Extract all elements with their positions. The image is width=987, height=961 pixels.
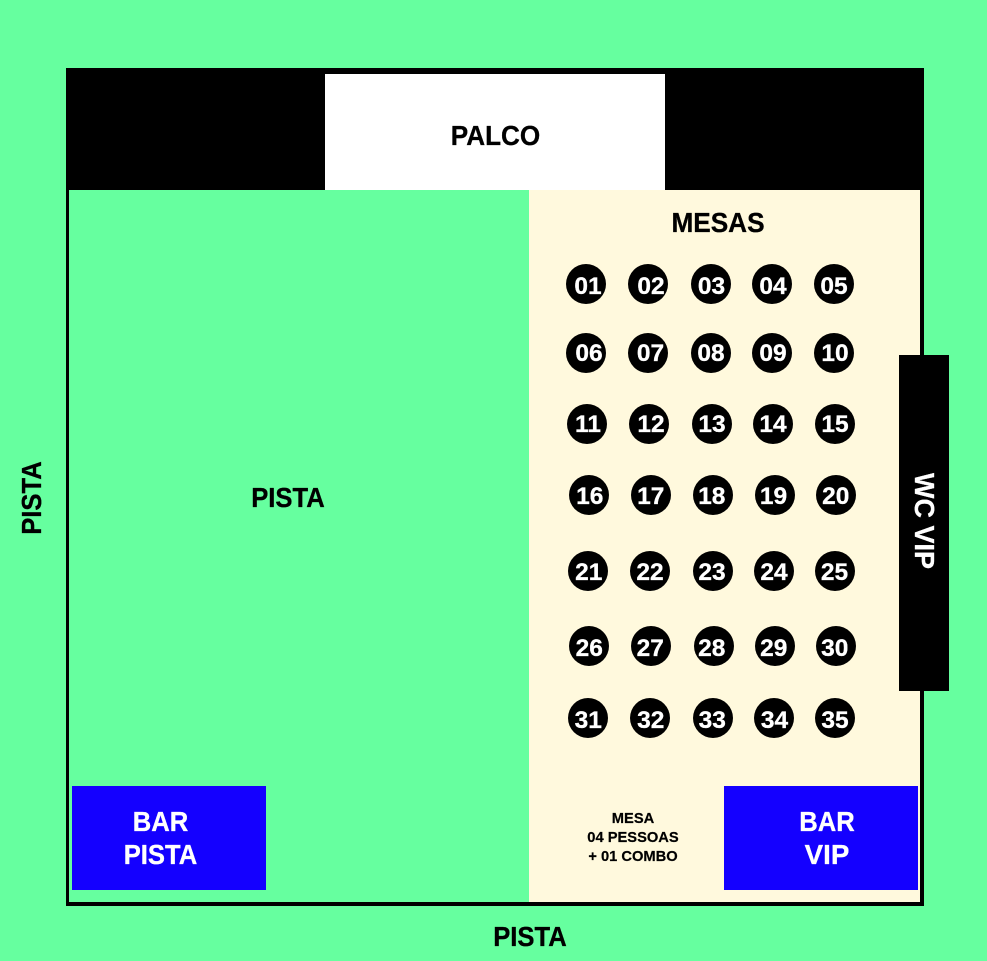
table 28 <box>694 626 734 666</box>
table 26 <box>569 626 609 666</box>
table 12 <box>629 404 669 444</box>
table 31 <box>568 698 608 738</box>
table 06 <box>566 333 606 373</box>
table 18: 18 <box>698 483 725 510</box>
table 12: 12 <box>637 411 665 438</box>
table 30: 30 <box>821 635 848 662</box>
note: mesa capacity: + 01 COMBO <box>588 849 678 865</box>
panel: wc vip <box>899 355 949 691</box>
table 25 <box>815 551 855 591</box>
table 07: 07 <box>637 340 664 367</box>
table 26: 26 <box>576 635 603 662</box>
table 20 <box>816 475 856 515</box>
table 10 <box>814 333 854 373</box>
table 02 <box>628 264 668 304</box>
table 03 <box>691 264 731 304</box>
table 29: 29 <box>760 635 787 662</box>
note: mesa capacity <box>587 811 679 865</box>
table 35: 35 <box>821 707 849 734</box>
table 01: 01 <box>574 273 602 300</box>
table 07 <box>628 333 668 373</box>
label: wc vip: WC VIP <box>909 473 940 569</box>
table 04 <box>752 264 792 304</box>
table 11: 11 <box>575 411 601 438</box>
note: mesa capacity: 04 PESSOAS <box>587 830 679 846</box>
table 27: 27 <box>637 635 664 662</box>
label: bar vip: VIP <box>805 839 849 870</box>
table 30 <box>816 626 856 666</box>
table 35 <box>815 698 855 738</box>
panel: bar pista <box>72 786 266 890</box>
label: bar vip: BAR <box>799 806 855 837</box>
table 27 <box>631 626 671 666</box>
table 08 <box>691 333 731 373</box>
table 18 <box>693 475 733 515</box>
table 11 <box>567 404 607 444</box>
table 19 <box>755 475 795 515</box>
table 05: 05 <box>820 273 848 300</box>
table 32 <box>630 698 670 738</box>
table 06: 06 <box>575 340 603 367</box>
note: mesa capacity: MESA <box>612 811 654 827</box>
table 02: 02 <box>637 273 665 300</box>
table 21 <box>568 551 608 591</box>
table 34: 34 <box>761 707 788 734</box>
venue floor plan <box>66 68 924 906</box>
table 22: 22 <box>636 559 664 586</box>
table 01 <box>566 264 606 304</box>
table 03: 03 <box>698 273 725 300</box>
table markers <box>566 264 856 738</box>
table 34 <box>754 698 794 738</box>
table 16: 16 <box>576 483 603 510</box>
table 14 <box>753 404 793 444</box>
table 22 <box>630 551 670 591</box>
table 16 <box>569 475 609 515</box>
table 19: 19 <box>760 483 787 510</box>
table 23 <box>693 551 733 591</box>
table 28: 28 <box>698 635 725 662</box>
table 14: 14 <box>759 411 787 438</box>
stage band <box>66 68 924 190</box>
table 10: 10 <box>821 340 849 367</box>
panel: bar vip <box>724 786 918 890</box>
table 21: 21 <box>575 559 602 586</box>
label: bar pista: BAR <box>133 806 188 837</box>
heading: mesas: MESAS <box>671 207 765 238</box>
table 09 <box>752 333 792 373</box>
table 24 <box>754 551 794 591</box>
table 15: 15 <box>821 411 849 438</box>
table 15 <box>815 404 855 444</box>
table 23: 23 <box>698 559 726 586</box>
table 33 <box>693 698 733 738</box>
table 05 <box>814 264 854 304</box>
stage: palco <box>325 74 665 190</box>
table 31: 31 <box>575 707 602 734</box>
table 33: 33 <box>699 707 726 734</box>
table 17 <box>631 475 671 515</box>
label: bar vip <box>799 806 855 870</box>
label: pista left: PISTA <box>16 461 47 535</box>
table 04: 04 <box>759 273 787 300</box>
table 09: 09 <box>759 340 787 367</box>
table 13 <box>692 404 732 444</box>
table 08: 08 <box>697 340 725 367</box>
panel: mesas area <box>529 190 920 902</box>
table 29 <box>755 626 795 666</box>
label: bar pista: PISTA <box>124 839 197 870</box>
table 24: 24 <box>760 559 788 586</box>
table 13: 13 <box>698 411 726 438</box>
table 17: 17 <box>637 483 664 510</box>
table 25: 25 <box>821 559 848 586</box>
table 20: 20 <box>822 483 849 510</box>
heading: palco: PALCO <box>451 120 540 151</box>
label: bar pista <box>124 806 197 870</box>
table 32: 32 <box>637 707 664 734</box>
label: pista bottom: PISTA <box>493 921 567 952</box>
label: pista center: PISTA <box>251 482 325 513</box>
